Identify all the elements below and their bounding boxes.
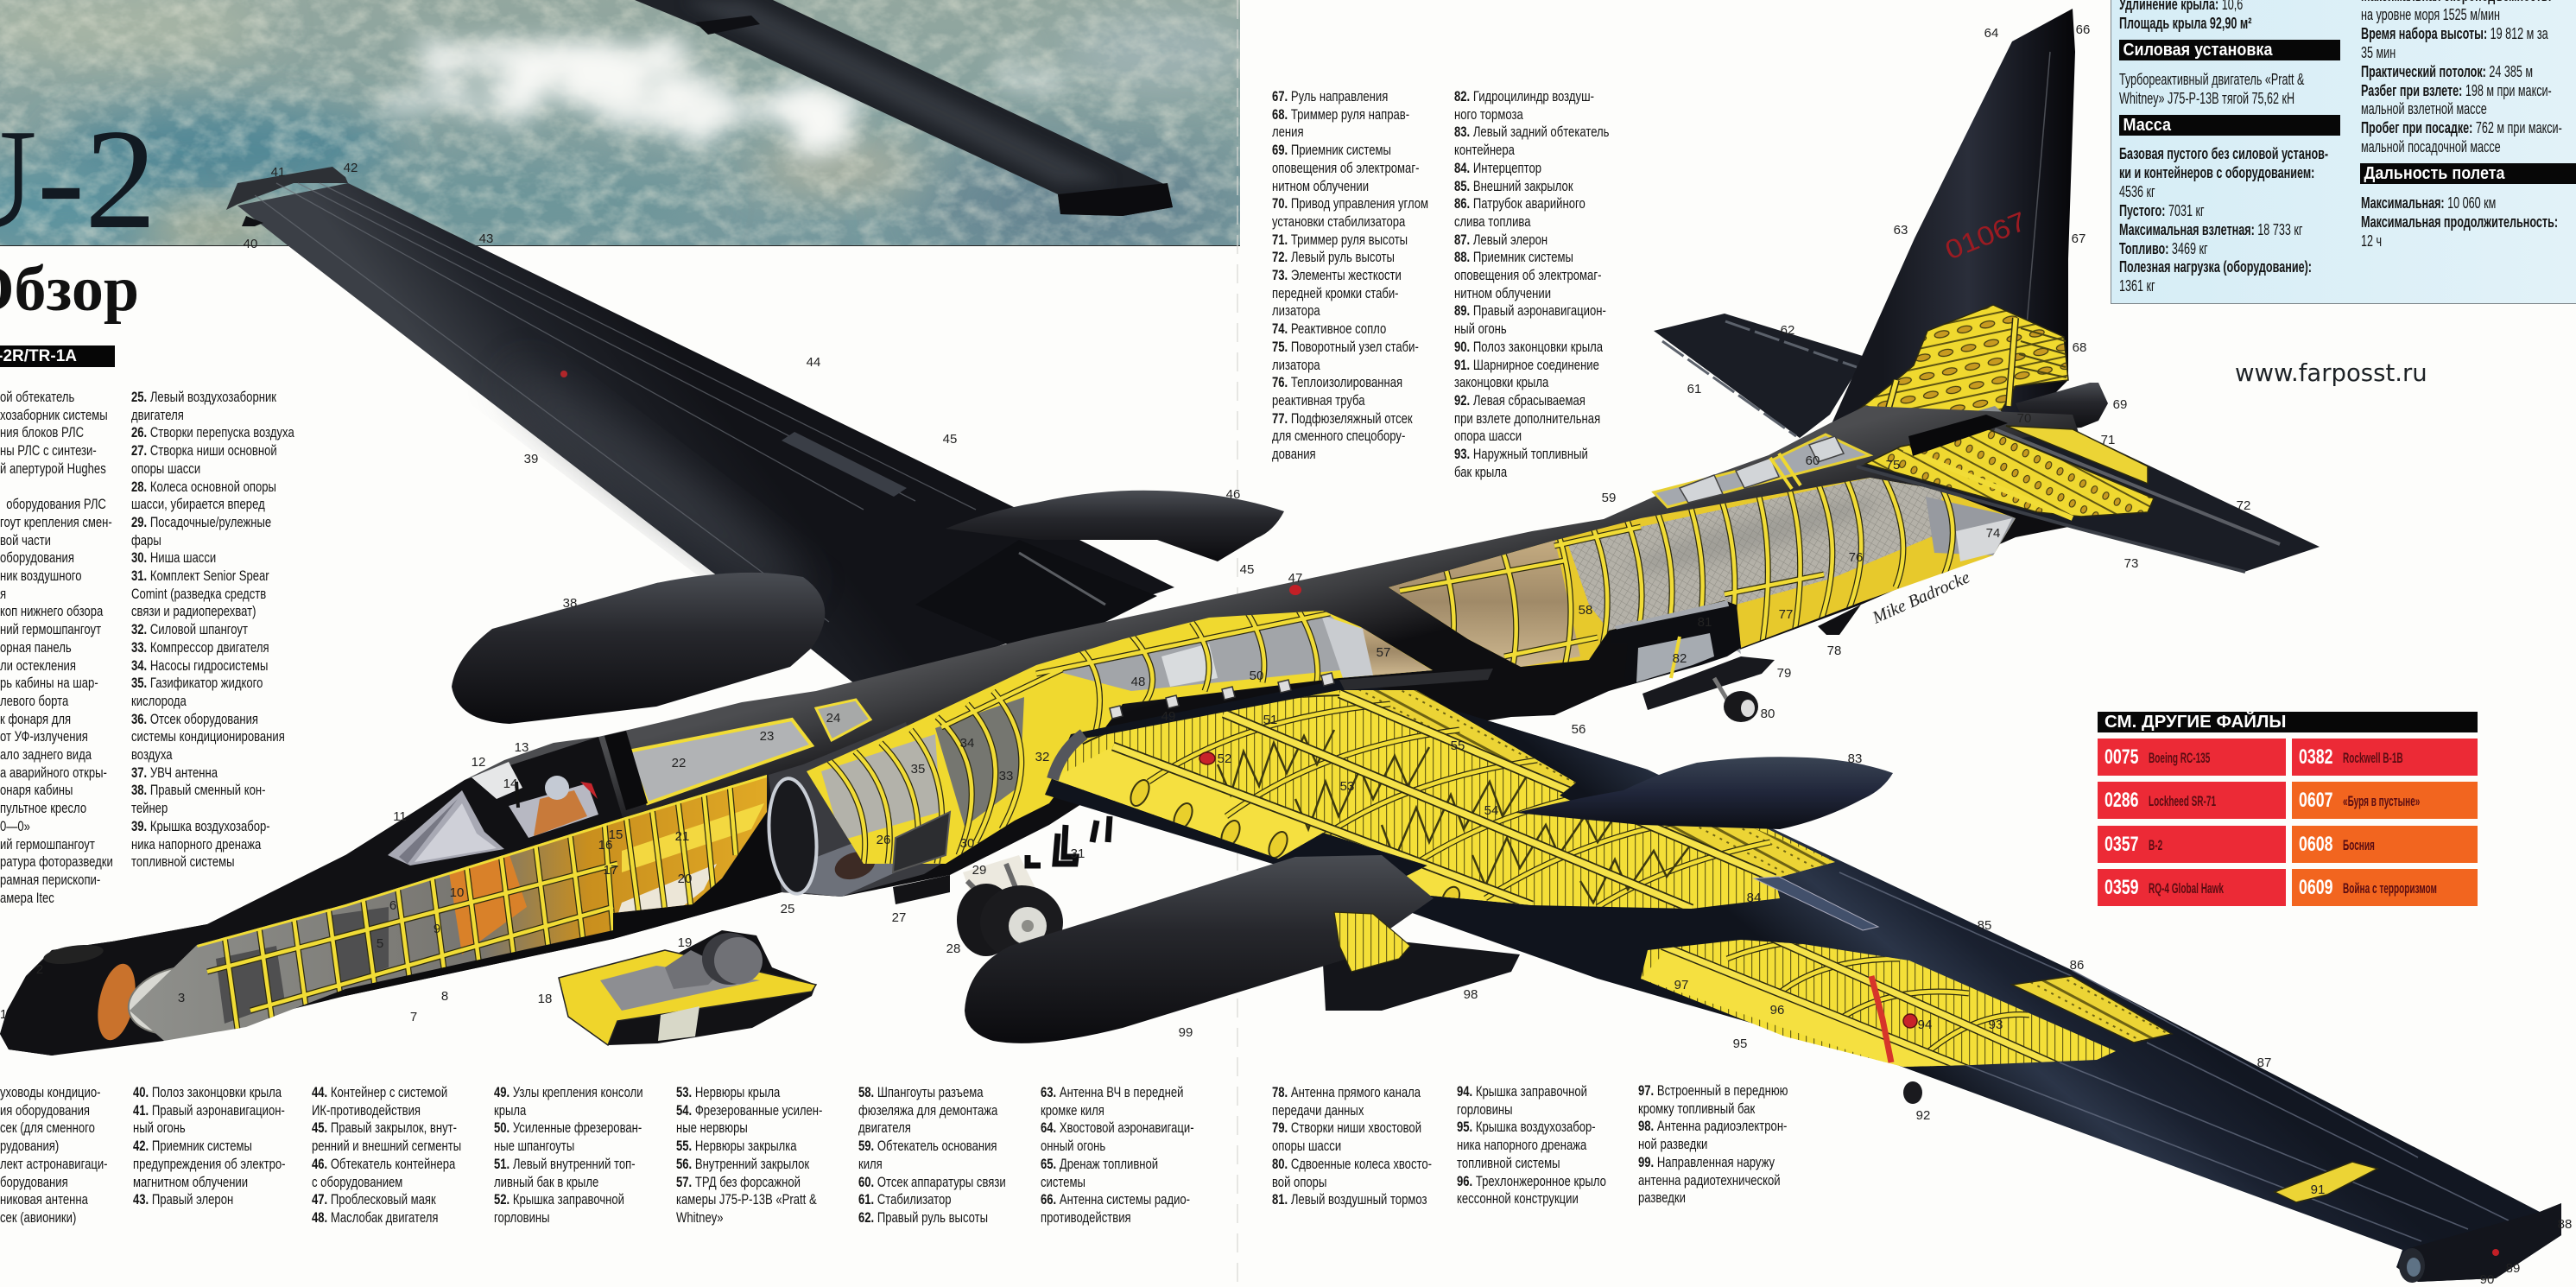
tail fin (63-68): [1830, 9, 2075, 443]
callout numbers on the illustration: 89: [2506, 1261, 2520, 1276]
callout numbers on the illustration: 63: [1894, 223, 1908, 238]
callout numbers on the illustration: 1: [0, 1007, 7, 1022]
panel: specifications box: [2111, 0, 2576, 304]
file card 0608: 0608: [2299, 833, 2333, 856]
wingtip pod and skid (88-90): [2396, 1203, 2561, 1283]
page fold: [1237, 0, 1238, 1287]
callout numbers on the illustration: 19: [678, 935, 692, 950]
callout numbers on the illustration: 74: [1986, 526, 2000, 541]
file card 0075: [2098, 739, 2286, 776]
callout numbers on the illustration: 20: [678, 872, 692, 886]
callout numbers on the illustration: 66: [2076, 22, 2090, 37]
callout numbers on the illustration: 91: [2311, 1182, 2325, 1197]
callout numbers on the illustration: 73: [2124, 556, 2138, 571]
callout numbers on the illustration: 62: [1781, 323, 1794, 338]
wing pylon rib (59): [1339, 669, 1493, 690]
avionics window (24): [816, 700, 870, 740]
heading: mass: Масса: [2123, 116, 2171, 135]
callout numbers on the illustration: 84: [1747, 891, 1761, 905]
callout numbers on the illustration: 93: [1989, 1018, 2003, 1032]
file card 0286: Lockheed SR-71: [2149, 793, 2216, 809]
callout numbers on the illustration: 48: [1131, 675, 1145, 689]
file card 0609: Война с терроризмом: [2343, 880, 2437, 897]
callout numbers on the illustration: 22: [672, 756, 686, 770]
callout numbers on the illustration: 61: [1687, 382, 1701, 396]
heading: powerplant: [2119, 40, 2340, 60]
heading: see other files: [2098, 712, 2478, 732]
callout numbers on the illustration: 51: [1263, 713, 1277, 727]
callout numbers on the illustration: 40: [244, 237, 257, 251]
callout numbers on the illustration: 15: [609, 827, 623, 842]
callout numbers on the illustration: 45: [943, 432, 957, 447]
left container pod (99): [965, 855, 1434, 1043]
callout numbers on the illustration: 50: [1250, 669, 1263, 683]
file card 0609: 0609: [2299, 876, 2333, 899]
gear door (27): [893, 875, 950, 904]
callout numbers on the illustration: 43: [479, 231, 493, 246]
list: callouts 58-62: 58. Шпангоуты разъема фюзеляжа для демонтажа двигателя 59. Обтекатель основания киля 60. Отсек аппаратуры связи 61. Стабилизатор 62. Правый руль высоты: [858, 1084, 1006, 1226]
callout numbers on the illustration: 68: [2073, 340, 2086, 355]
nose radome section (1-4): [42, 941, 241, 1043]
list: cropped bottom column: уховоды кондицио- ия оборудования сек (для сменного рудования) лект астронавигаци- борудования никовая антенна сек (авионики): [0, 1084, 108, 1226]
callout numbers on the illustration: 41: [271, 165, 285, 180]
callout numbers on the illustration: 86: [2070, 958, 2084, 973]
callout numbers on the illustration: 98: [1464, 987, 1478, 1002]
dark fuselage band: [604, 731, 648, 810]
file card 0075: 0075: [2104, 745, 2139, 769]
callout numbers on the illustration: 33: [999, 769, 1013, 783]
fin cutaway structure: [1852, 305, 2068, 443]
fuel filler cap (94): [1903, 1014, 1917, 1028]
callout numbers on the illustration: 49: [1161, 709, 1175, 724]
callout numbers on the illustration: 59: [1602, 491, 1616, 505]
callout numbers on the illustration: 72: [2237, 498, 2250, 513]
callout numbers on the illustration: 97: [1674, 978, 1688, 992]
file card 0609: [2292, 869, 2478, 906]
callout numbers on the illustration: 99: [1179, 1025, 1193, 1040]
forward lower black fairing: [345, 812, 782, 996]
beacon (47): [1289, 585, 1301, 595]
callout numbers on the illustration: 9: [434, 922, 440, 936]
callout numbers on the illustration: 60: [1806, 453, 1820, 468]
callout numbers on the illustration: 7: [410, 1010, 417, 1024]
list: callouts 25-39: 25. Левый воздухозаборник двигателя 26. Створки перепуска воздуха 27. Створка ниши основной опоры шасси 28. Колеса основной опоры шасси, убирается вперед 29. Посадочные/рулежные фары 30. Ниша шасси 31. Комплект Senior Spear Comint (разведка средств связи и радиоперехват) 32. Силовой шпангоут 33. Компрессор двигателя 34. Насосы гидросистемы 35. Газификатор жидкого кислорода 36. Отсек оборудования системы кондиционирования воздуха 37. УВЧ антенна 38. Правый сменный кон- тейнер 39. Крышка воздухозабор- ника напорного дренажа топливной системы: [131, 389, 294, 870]
callout numbers on the illustration: 92: [1916, 1108, 1930, 1123]
list: callouts 1-24 cropped column: ой обтекатель хозаборник системы ния блоков РЛС ны РЛС с синтези- й апертурой Hughes оборудования РЛС гоут крепления смен- вой части оборудования ник воздушного я коп нижнего обзора ний гермошпангоут орная панель ли остекления рь кабины на шар- левого борта к фонаря для от УФ-излучения ало заднего вида а аварийного откры- онаря кабины пультное кресло 0—0» ий гермошпангоут ратура фоторазведки рамная перископи- амера Itec: [0, 389, 113, 906]
callout numbers on the illustration: 47: [1288, 571, 1302, 586]
callout numbers on the illustration: 87: [2257, 1056, 2271, 1070]
callout numbers on the illustration: 54: [1484, 803, 1498, 818]
fin serial number: 01067: [1941, 206, 2030, 265]
callout numbers on the illustration: 3: [178, 991, 185, 1005]
list: callouts 63-66: 63. Антенна ВЧ в передней кромке киля 64. Хвостовой аэронавигаци- онный огонь 65. Дренаж топливной системы 66. Антенна системы радио- противодействия: [1041, 1084, 1194, 1226]
callout numbers on the illustration: 77: [1779, 607, 1793, 622]
callout numbers on the illustration: 13: [515, 740, 528, 755]
tail wheels (80): [1714, 678, 1758, 722]
photo: U-2 wing from above: [635, 0, 1173, 216]
callout numbers on the illustration: 52: [1218, 751, 1231, 766]
file card 0286: [2098, 782, 2286, 819]
list: callouts 53-57: 53. Нервюры крыла 54. Фрезерованные усилен- ные нервюры 55. Нервюры закрылка 56. Внутренний закрылок 57. ТРД без форсажной камеры J75-P-13B «Pratt & Whitney»: [676, 1084, 822, 1226]
file card 0607: «Буря в пустыне»: [2343, 793, 2420, 809]
wing inner yellow structure (49-55): [1036, 673, 1857, 924]
callout numbers on the illustration: 56: [1572, 722, 1585, 737]
list: callouts 97-99: 97. Встроенный в переднюю кромку топливный бак 98. Антенна радиоэлектрон- ной разведки 99. Направленная наружу антенна радиотехнической разведки: [1638, 1082, 1788, 1206]
fuel filler cap (52): [1199, 752, 1215, 764]
wingtip hinge cutaway (91): [2275, 1162, 2377, 1202]
inner flap dark strip (56): [1389, 690, 1648, 783]
far wing (right wing): [226, 167, 1174, 691]
callout numbers on the illustration: 35: [911, 762, 925, 777]
pod yellow cutaway: [1334, 912, 1410, 972]
callout numbers on the illustration: 2: [36, 962, 43, 977]
file card 0608: [2292, 826, 2478, 863]
equipment bay hatch (22, 23): [628, 720, 812, 803]
callout numbers on the illustration: 5: [377, 936, 383, 951]
specs: range text: Максимальная: 10 060 км Максимальная продолжительность: 12 ч: [2361, 194, 2558, 250]
right container rear fairing (46): [946, 491, 1284, 561]
callout numbers on the illustration: 57: [1377, 645, 1390, 660]
specs: mass text: Базовая пустого без силовой установ- ки и контейнеров с оборудованием: 4536 кг Пустого: 7031 кг Максимальная взлетная: 18 733 кг Топливо: 3469 кг Полезная нагрузка (оборудование): 1361 кг: [2119, 145, 2328, 295]
file card 0359: 0359: [2104, 876, 2139, 899]
callout numbers on the illustration: 55: [1451, 739, 1465, 753]
callout numbers on the illustration: 42: [344, 161, 358, 175]
file card 0382: Rockwell B-1B: [2343, 750, 2403, 766]
bottom rear pod body (98): [1321, 933, 1520, 1011]
engine air intake nacelle (25): [764, 722, 946, 897]
callout numbers on the illustration: 80: [1761, 707, 1775, 721]
callout numbers on the illustration: 11: [393, 809, 407, 824]
file card 0607: 0607: [2299, 789, 2333, 812]
aileron cutaway strip (87): [2012, 976, 2172, 1043]
main engine bay cutaway (26, 32-35, 48-50, 57): [803, 605, 1442, 872]
photo bottom edge: [0, 245, 1240, 246]
callout numbers on the illustration: 39: [524, 452, 538, 466]
rear engine bay cutaway (58, 76, 77): [1389, 478, 2016, 667]
callout numbers on the illustration: 38: [563, 596, 577, 611]
callout numbers on the illustration: 25: [781, 902, 794, 916]
nose dark shading: [0, 737, 623, 1056]
specs: powerplant text: Турбореактивный двигатель «Pratt & Whitney» J75-P-13B тягой 75,62 кН: [2119, 71, 2304, 107]
callout numbers on the illustration: 30: [960, 836, 974, 851]
file card 0359: RQ-4 Global Hawk: [2149, 880, 2224, 897]
callout numbers on the illustration: 82: [1673, 651, 1687, 666]
fuselage: [0, 406, 2090, 1056]
callout numbers on the illustration: 31: [1071, 846, 1085, 861]
file card 0286: 0286: [2104, 789, 2139, 812]
near wing (left wing): [1045, 680, 2561, 1282]
callout numbers on the illustration: 96: [1770, 1003, 1784, 1018]
panel: see other files: [2098, 712, 2478, 906]
list: callouts 40-43: 40. Полоз законцовки крыла 41. Правый аэронавигацион- ный огонь 42. Приемник системы предупреждения об электро- магнитном облучении 43. Правый элерон: [133, 1084, 285, 1208]
air brake (81, 82): [1611, 600, 1741, 687]
callout numbers on the illustration: 70: [2017, 411, 2031, 426]
callout numbers on the illustration: 44: [807, 355, 820, 370]
rear antenna pod (69): [2016, 383, 2108, 432]
main landing gear (28, 29): [957, 855, 1063, 960]
callout numbers on the illustration: 16: [598, 838, 612, 853]
right container pod (38): [452, 573, 825, 724]
callout numbers on the illustration: 23: [760, 729, 774, 744]
callout numbers on the illustration: 76: [1849, 550, 1863, 565]
callout numbers on the illustration: 24: [826, 711, 840, 726]
callout numbers on the illustration: 69: [2113, 397, 2127, 412]
signature: Mike Badrocke: Mike Badrocke: [1869, 567, 1973, 628]
callout numbers on the illustration: 21: [675, 829, 689, 844]
callout numbers on the illustration: 27: [892, 910, 906, 925]
file card 0357: B-2: [2149, 837, 2162, 853]
callout numbers on the illustration: 67: [2072, 231, 2085, 246]
callout numbers on the illustration: 26: [877, 833, 890, 847]
subheading bar: U-2R/TR-1A: [0, 346, 115, 367]
list: callouts 67-77: 67. Руль направления 68. Триммер руля направ- ления 69. Приемник системы оповещения об электромаг- нитном облучении 70. Привод управления углом установки стабилизатора 71. Триммер руля высоты 72. Левый руль высоты 73. Элементы жесткости передней кромки стаби- лизатора 74. Реактивное сопло 75. Поворотный узел стаби- лизатора 76. Теплоизолированная реактивная труба 77. Подфюзеляжный отсек для сменного спецобору- дования: [1272, 88, 1428, 462]
callout numbers on the illustration: 90: [2480, 1272, 2494, 1287]
heading: mass: [2119, 115, 2340, 136]
right elevator far stabilizer (61, 62): [1654, 314, 1865, 438]
callout numbers on the illustration: 94: [1918, 1018, 1932, 1032]
callout numbers on the illustration: 28: [946, 941, 960, 956]
callout numbers on the illustration: 71: [2101, 433, 2115, 447]
callout numbers on the illustration: 75: [1886, 458, 1900, 472]
callout numbers on the illustration: 88: [2558, 1217, 2572, 1232]
photo: aerial sky background: [0, 0, 1252, 258]
spoiler panel (84): [1754, 877, 1878, 930]
communications bay window (60): [1654, 434, 1870, 507]
callout numbers on the illustration: 58: [1579, 603, 1592, 618]
file card 0357: [2098, 826, 2286, 863]
heading: powerplant: Силовая установка: [2123, 41, 2272, 60]
file card 0382: [2292, 739, 2478, 776]
callout numbers on the illustration: 95: [1733, 1037, 1747, 1051]
file card 0357: 0357: [2104, 833, 2139, 856]
callout numbers on the illustration: 18: [538, 992, 552, 1006]
heading: range: [2360, 163, 2576, 184]
callout numbers on the illustration: 34: [960, 736, 974, 751]
cockpit canopy (11-14): [388, 762, 598, 865]
callout numbers on the illustration: 10: [450, 885, 464, 900]
front drop gear (92): [1903, 1081, 1922, 1104]
callout numbers on the illustration: 32: [1035, 750, 1049, 764]
callout numbers on the illustration: 45: [1240, 562, 1254, 577]
callout numbers on the illustration: 17: [604, 863, 617, 878]
rudder base strut / gear door rear (78, 79): [1642, 605, 1861, 710]
SIGINT antennas (31): [1028, 816, 1110, 865]
forward fuselage cutaway (5-21): [130, 769, 773, 1045]
callout numbers on the illustration: 81: [1698, 615, 1712, 630]
list: callouts 78-81: 78. Антенна прямого канала передачи данных 79. Створки ниши хвостовой опоры шасси 80. Сдвоенные колеса хвосто- вой опоры 81. Левый воздушный тормоз: [1272, 1084, 1432, 1208]
callout numbers on the illustration: 53: [1340, 779, 1354, 794]
callout numbers on the illustration: 46: [1226, 487, 1240, 502]
website watermark: www.farposst.ru: [2235, 359, 2427, 387]
heading: see other files: СМ. ДРУГИЕ ФАЙЛЫ: [2104, 712, 2286, 732]
left rear pod (83): [1516, 757, 1893, 829]
left stabilizer (71-75): [1857, 415, 2320, 572]
intake vent grille (26): [893, 812, 950, 872]
callout numbers on the illustration: 6: [389, 898, 396, 913]
list: callouts 82-93: 82. Гидроцилиндр воздуш- ного тормоза 83. Левый задний обтекатель контейнера 84. Интерцептор 85. Внешний закрылок 86. Патрубок аварийного слива топлива 87. Левый элерон 88. Приемник системы оповещения об электромаг- нитном облучении 89. Правый аэронавигацион- ный огонь 90. Полоз законцовки крыла 91. Шарнирное соединение законцовки крыла 92. Левая сбрасываемая при взлете дополнительная опора шасси 93. Наружный топливный бак крыла: [1454, 88, 1610, 480]
wing panel lines: [1839, 872, 2509, 1241]
callout numbers on the illustration: 14: [503, 777, 517, 791]
callout numbers on the illustration: 64: [1984, 26, 1998, 41]
list: callouts 49-52: 49. Узлы крепления консоли крыла 50. Усиленные фрезерован- ные шпангоуты 51. Левый внутренний топ- ливный бак в крыле 52. Крышка заправочной горловины: [494, 1084, 643, 1226]
list: callouts 94-96: 94. Крышка заправочной горловины 95. Крышка воздухозабор- ника напорного дренажа топливной системы 96. Трехлонжеронное крыло кессонной конструкции: [1457, 1083, 1606, 1207]
file card 0382: 0382: [2299, 745, 2333, 769]
callout numbers on the illustration: 12: [472, 755, 485, 770]
list: callouts 44-48: 44. Контейнер с системой ИК-противодействия 45. Правый закрылок, внут- ренний и внешний сегменты 46. Обтекатель контейнера с оборудованием 47. Проблесковый маяк 48. Маслобак двигателя: [312, 1084, 461, 1226]
wing outer yellow structure (93-97): [1641, 940, 2116, 1067]
file card 0608: Босния: [2343, 837, 2375, 853]
callout numbers on the illustration: 78: [1827, 644, 1841, 658]
file card 0075: Boeing RC-135: [2149, 750, 2210, 766]
callout numbers on the illustration: 85: [1978, 918, 1991, 933]
callout numbers on the illustration: 29: [972, 863, 986, 878]
heading: range: Дальность полета: [2364, 164, 2505, 183]
removable nose camera unit (18, 19): [559, 930, 816, 1045]
callout numbers on the illustration: 8: [441, 989, 448, 1004]
callout numbers on the illustration: 83: [1848, 751, 1862, 766]
callout numbers on the illustration: 79: [1777, 666, 1791, 681]
file card 0607: [2292, 782, 2478, 819]
file card 0359: [2098, 869, 2286, 906]
